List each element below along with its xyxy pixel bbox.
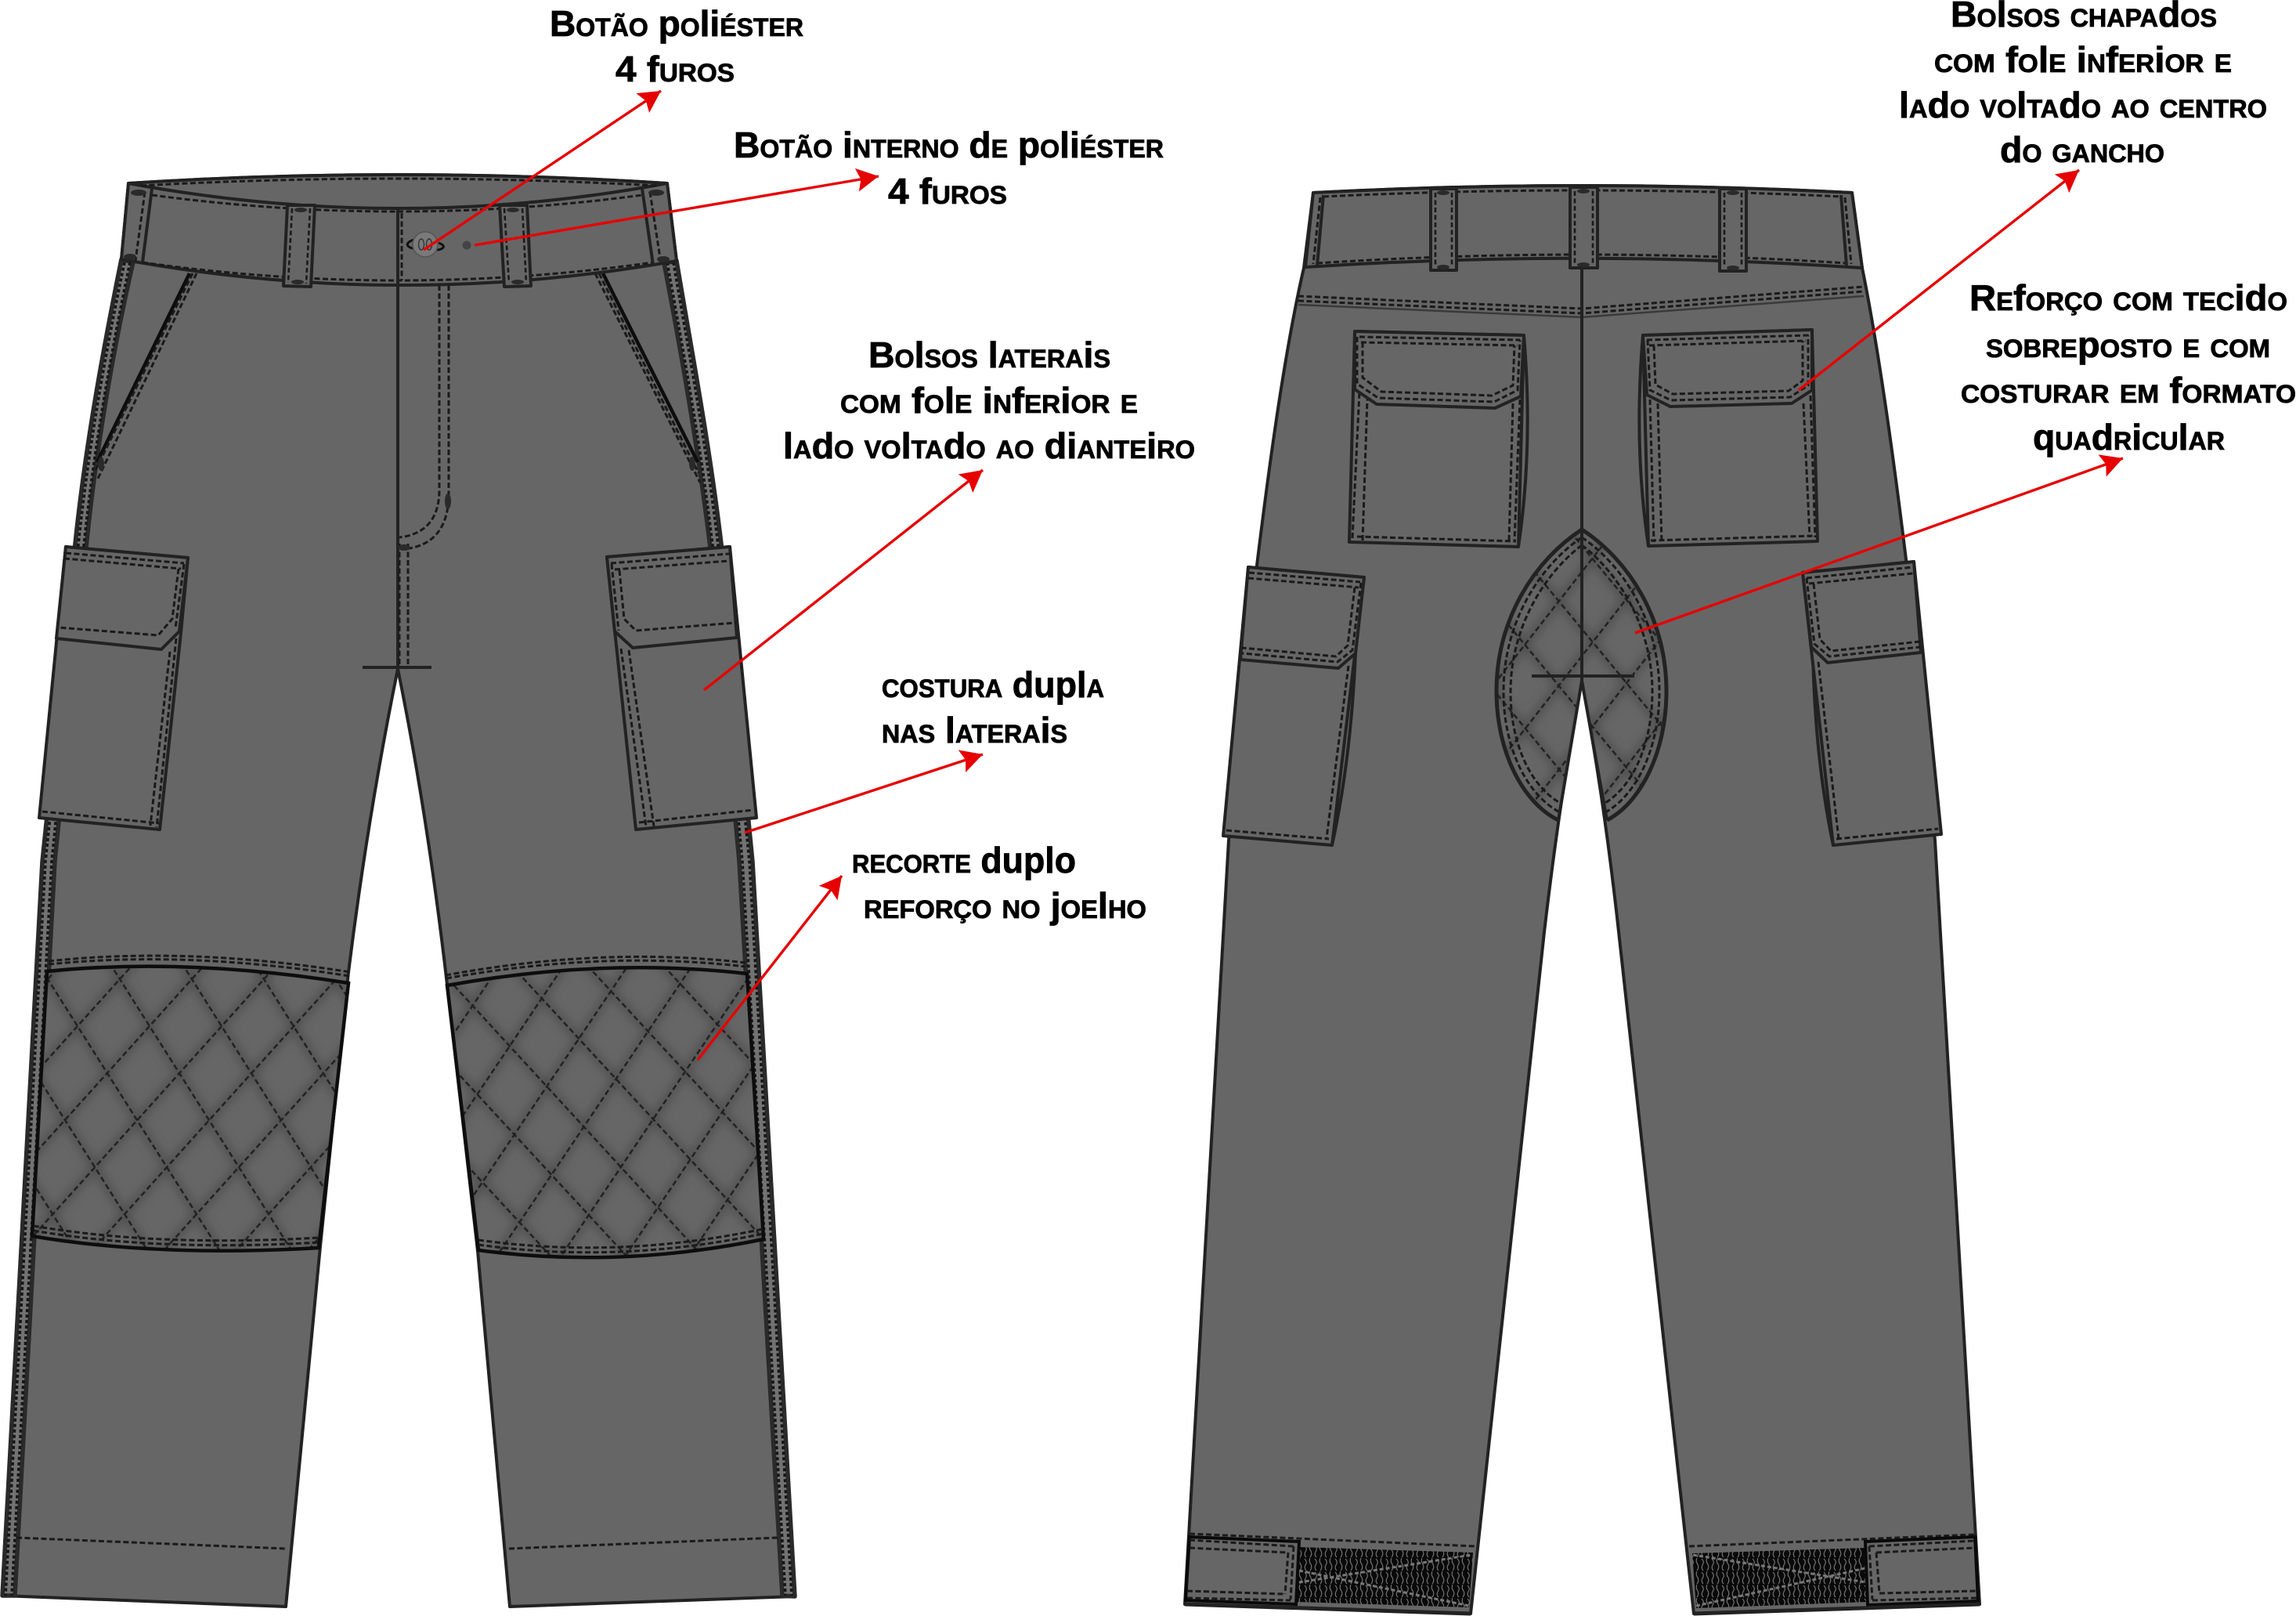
back left cargo pocket xyxy=(1223,567,1364,845)
label: knee reinforcement: reforço no joelho xyxy=(864,885,1146,926)
arrow: inner button xyxy=(475,176,879,245)
back silhouette xyxy=(1185,186,1980,1614)
label: side pockets: lado voltado ao dianteiro xyxy=(783,425,1195,466)
arrow: polyester button xyxy=(424,91,661,250)
right slant pocket xyxy=(595,273,700,483)
label: gusset reinforcement: costurar em formato xyxy=(1961,370,2296,410)
arrow: side pockets xyxy=(704,470,983,690)
label: double side seam: nas laterais xyxy=(882,710,1067,750)
left cargo pocket xyxy=(39,547,188,830)
back view of pants xyxy=(1185,186,1980,1614)
left knee quilted reinforcement xyxy=(27,956,352,1261)
front view of pants xyxy=(2,175,795,1607)
arrow: patch pockets xyxy=(1799,170,2079,390)
back centre belt loop xyxy=(1570,187,1597,268)
front right belt loop xyxy=(500,205,531,287)
label: inner button xyxy=(734,125,1164,211)
label: inner button: Botão interno de poliéster xyxy=(734,125,1164,165)
right side double seam xyxy=(664,261,795,1596)
label: patch pockets: do gancho xyxy=(2000,129,2164,170)
label: polyester button: 4 furos xyxy=(616,49,735,89)
label: knee reinforcement xyxy=(852,840,1146,926)
left slant pocket xyxy=(96,273,197,480)
label: patch pockets xyxy=(1899,0,2267,170)
left cuff with velcro xyxy=(1185,1534,1476,1614)
back left belt loop xyxy=(1431,189,1457,270)
front waistband xyxy=(121,175,677,285)
back centre seam xyxy=(1580,268,1583,681)
arrow: knee reinforcement xyxy=(698,876,842,1060)
label: side pockets: com fole inferior e xyxy=(840,380,1138,421)
label: gusset reinforcement xyxy=(1961,277,2296,457)
front fly stitching xyxy=(363,208,451,669)
label: polyester button: Botão poliéster xyxy=(550,3,803,44)
inner button xyxy=(462,241,471,249)
back yoke xyxy=(1298,287,1864,317)
back right patch pocket xyxy=(1639,330,1818,546)
label: knee reinforcement: recorte duplo xyxy=(852,840,1076,880)
left side double seam xyxy=(2,259,133,1596)
back right cargo pocket xyxy=(1803,562,1941,845)
label: side pockets: Bolsos laterais xyxy=(868,334,1110,375)
right cargo pocket xyxy=(607,547,756,830)
arrow: gusset reinforcement xyxy=(1635,458,2123,633)
right cuff with velcro xyxy=(1689,1535,1980,1614)
label: polyester button xyxy=(550,3,803,89)
label: gusset reinforcement: sobreposto e com xyxy=(1986,324,2270,365)
gusset quilted reinforcement xyxy=(1492,525,1672,822)
label: double side seam xyxy=(882,664,1104,750)
label: inner button: 4 furos xyxy=(888,171,1007,211)
label: patch pockets: com fole inferior e xyxy=(1934,39,2232,80)
label: gusset reinforcement: Reforço com tecido xyxy=(1969,277,2287,318)
label: patch pockets: lado voltado ao centro xyxy=(1899,85,2267,125)
back right belt loop xyxy=(1720,189,1746,271)
hem stitching xyxy=(16,1538,778,1549)
right knee quilted reinforcement xyxy=(445,956,766,1260)
front left belt loop xyxy=(283,205,315,287)
label: side pockets xyxy=(783,334,1195,466)
arrow: double side seam xyxy=(745,754,983,833)
back waistband xyxy=(1305,186,1862,268)
label: double side seam: costura dupla xyxy=(882,664,1104,705)
back left patch pocket xyxy=(1349,331,1528,547)
label: gusset reinforcement: quadricular xyxy=(2033,417,2225,457)
front silhouette xyxy=(2,175,795,1607)
polyester button four holes xyxy=(407,232,443,257)
